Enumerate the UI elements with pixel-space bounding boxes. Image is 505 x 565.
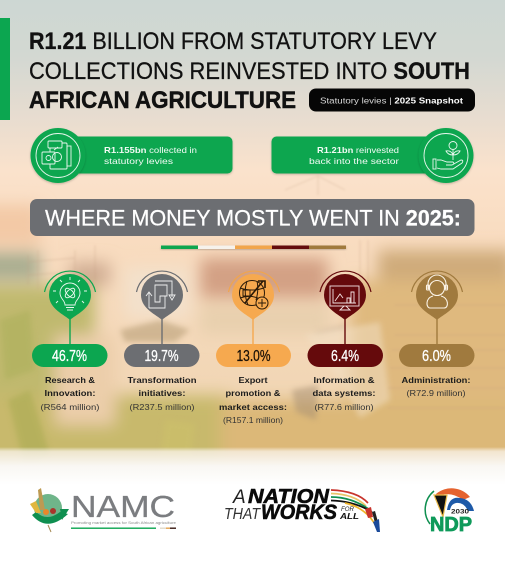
logo: a nation that works for all: FOR <box>341 506 354 513</box>
accent bar <box>0 18 10 120</box>
card: collected: R1.155bn collected in <box>104 145 197 155</box>
badge: 2025 snapshot: Statutory levies | 2025 Snapshot <box>320 96 463 106</box>
section heading: WHERE MONEY MOSTLY WENT IN 2025: <box>45 206 461 230</box>
item: research and innovation: Innovation: <box>44 388 96 398</box>
item: export promotion <box>216 271 291 425</box>
logo: NAMC: Promoting market access for South African agriculture <box>71 521 176 525</box>
item: research and innovation <box>32 271 108 412</box>
icon: headset person <box>426 275 448 308</box>
card: collected <box>30 128 232 183</box>
item: information and data systems: 6.4% <box>331 348 359 365</box>
item: information and data systems: Information & <box>314 375 374 385</box>
icon: hand and seedling <box>433 142 463 169</box>
title: R1.21 BILLION FROM STATUTORY LEVY <box>29 28 437 55</box>
item: research and innovation: Research & <box>45 375 95 385</box>
logo: NAMC <box>30 488 176 532</box>
logo: a nation that works for all: A <box>232 487 246 508</box>
colour strip <box>161 246 346 249</box>
item: export promotion: Export <box>238 375 268 385</box>
logo: NDP 2030: 2030 <box>451 508 469 516</box>
section heading <box>30 199 474 236</box>
logo: a nation that works for all: WORKS <box>261 501 337 524</box>
item: transformation initiatives: (R237.5 million) <box>130 402 195 412</box>
item: administration: Administration: <box>402 375 471 385</box>
item: information and data systems <box>308 271 383 412</box>
item: export promotion: market access: <box>219 402 287 412</box>
logo: NAMC: NAMC <box>71 489 175 524</box>
item: export promotion: 13.0% <box>236 348 270 365</box>
logo: a nation that works for all: NATION <box>248 486 330 508</box>
item: research and innovation: (R564 million) <box>40 402 100 412</box>
icon: money and phone <box>42 141 71 169</box>
item: administration: 6.0% <box>422 348 451 365</box>
card: reinvested: back into the sector <box>309 156 399 166</box>
logo: a nation that works for all: ALL <box>339 512 359 521</box>
title: AFRICAN AGRICULTURE <box>29 87 296 114</box>
title: COLLECTIONS REINVESTED INTO SOUTH <box>29 58 470 85</box>
item: transformation initiatives: initiatives: <box>138 388 186 398</box>
logo: a nation that works for all <box>224 486 380 532</box>
item: administration <box>399 271 474 398</box>
logo: NDP 2030 <box>425 488 474 536</box>
card: reinvested: R1.21bn reinvested <box>317 145 399 155</box>
item: information and data systems: data systems: <box>312 388 376 398</box>
item: export promotion: promotion & <box>226 388 280 398</box>
item: transformation initiatives: 19.7% <box>144 348 178 365</box>
icon: light bulb <box>53 277 87 310</box>
logo: a nation that works for all: THAT <box>224 506 261 523</box>
item: export promotion: (R157.1 million) <box>223 415 283 425</box>
card: collected: statutory levies <box>104 156 173 166</box>
badge: 2025 snapshot <box>309 88 475 112</box>
icon: NAMC globe <box>30 488 69 532</box>
icon: globe and arrow <box>240 280 268 309</box>
icon: chart monitor <box>330 286 359 310</box>
decorative flag swoosh <box>331 490 378 530</box>
icon: transformation squares <box>146 281 175 308</box>
item: administration: (R72.9 million) <box>406 388 466 398</box>
item: transformation initiatives <box>124 271 200 412</box>
title <box>29 28 470 114</box>
logo: NDP 2030: NDP <box>430 514 472 536</box>
card: reinvested <box>272 128 474 183</box>
item: research and innovation: 46.7% <box>52 348 87 365</box>
item: transformation initiatives: Transformation <box>128 375 196 385</box>
item: information and data systems: (R77.6 million) <box>314 402 374 412</box>
